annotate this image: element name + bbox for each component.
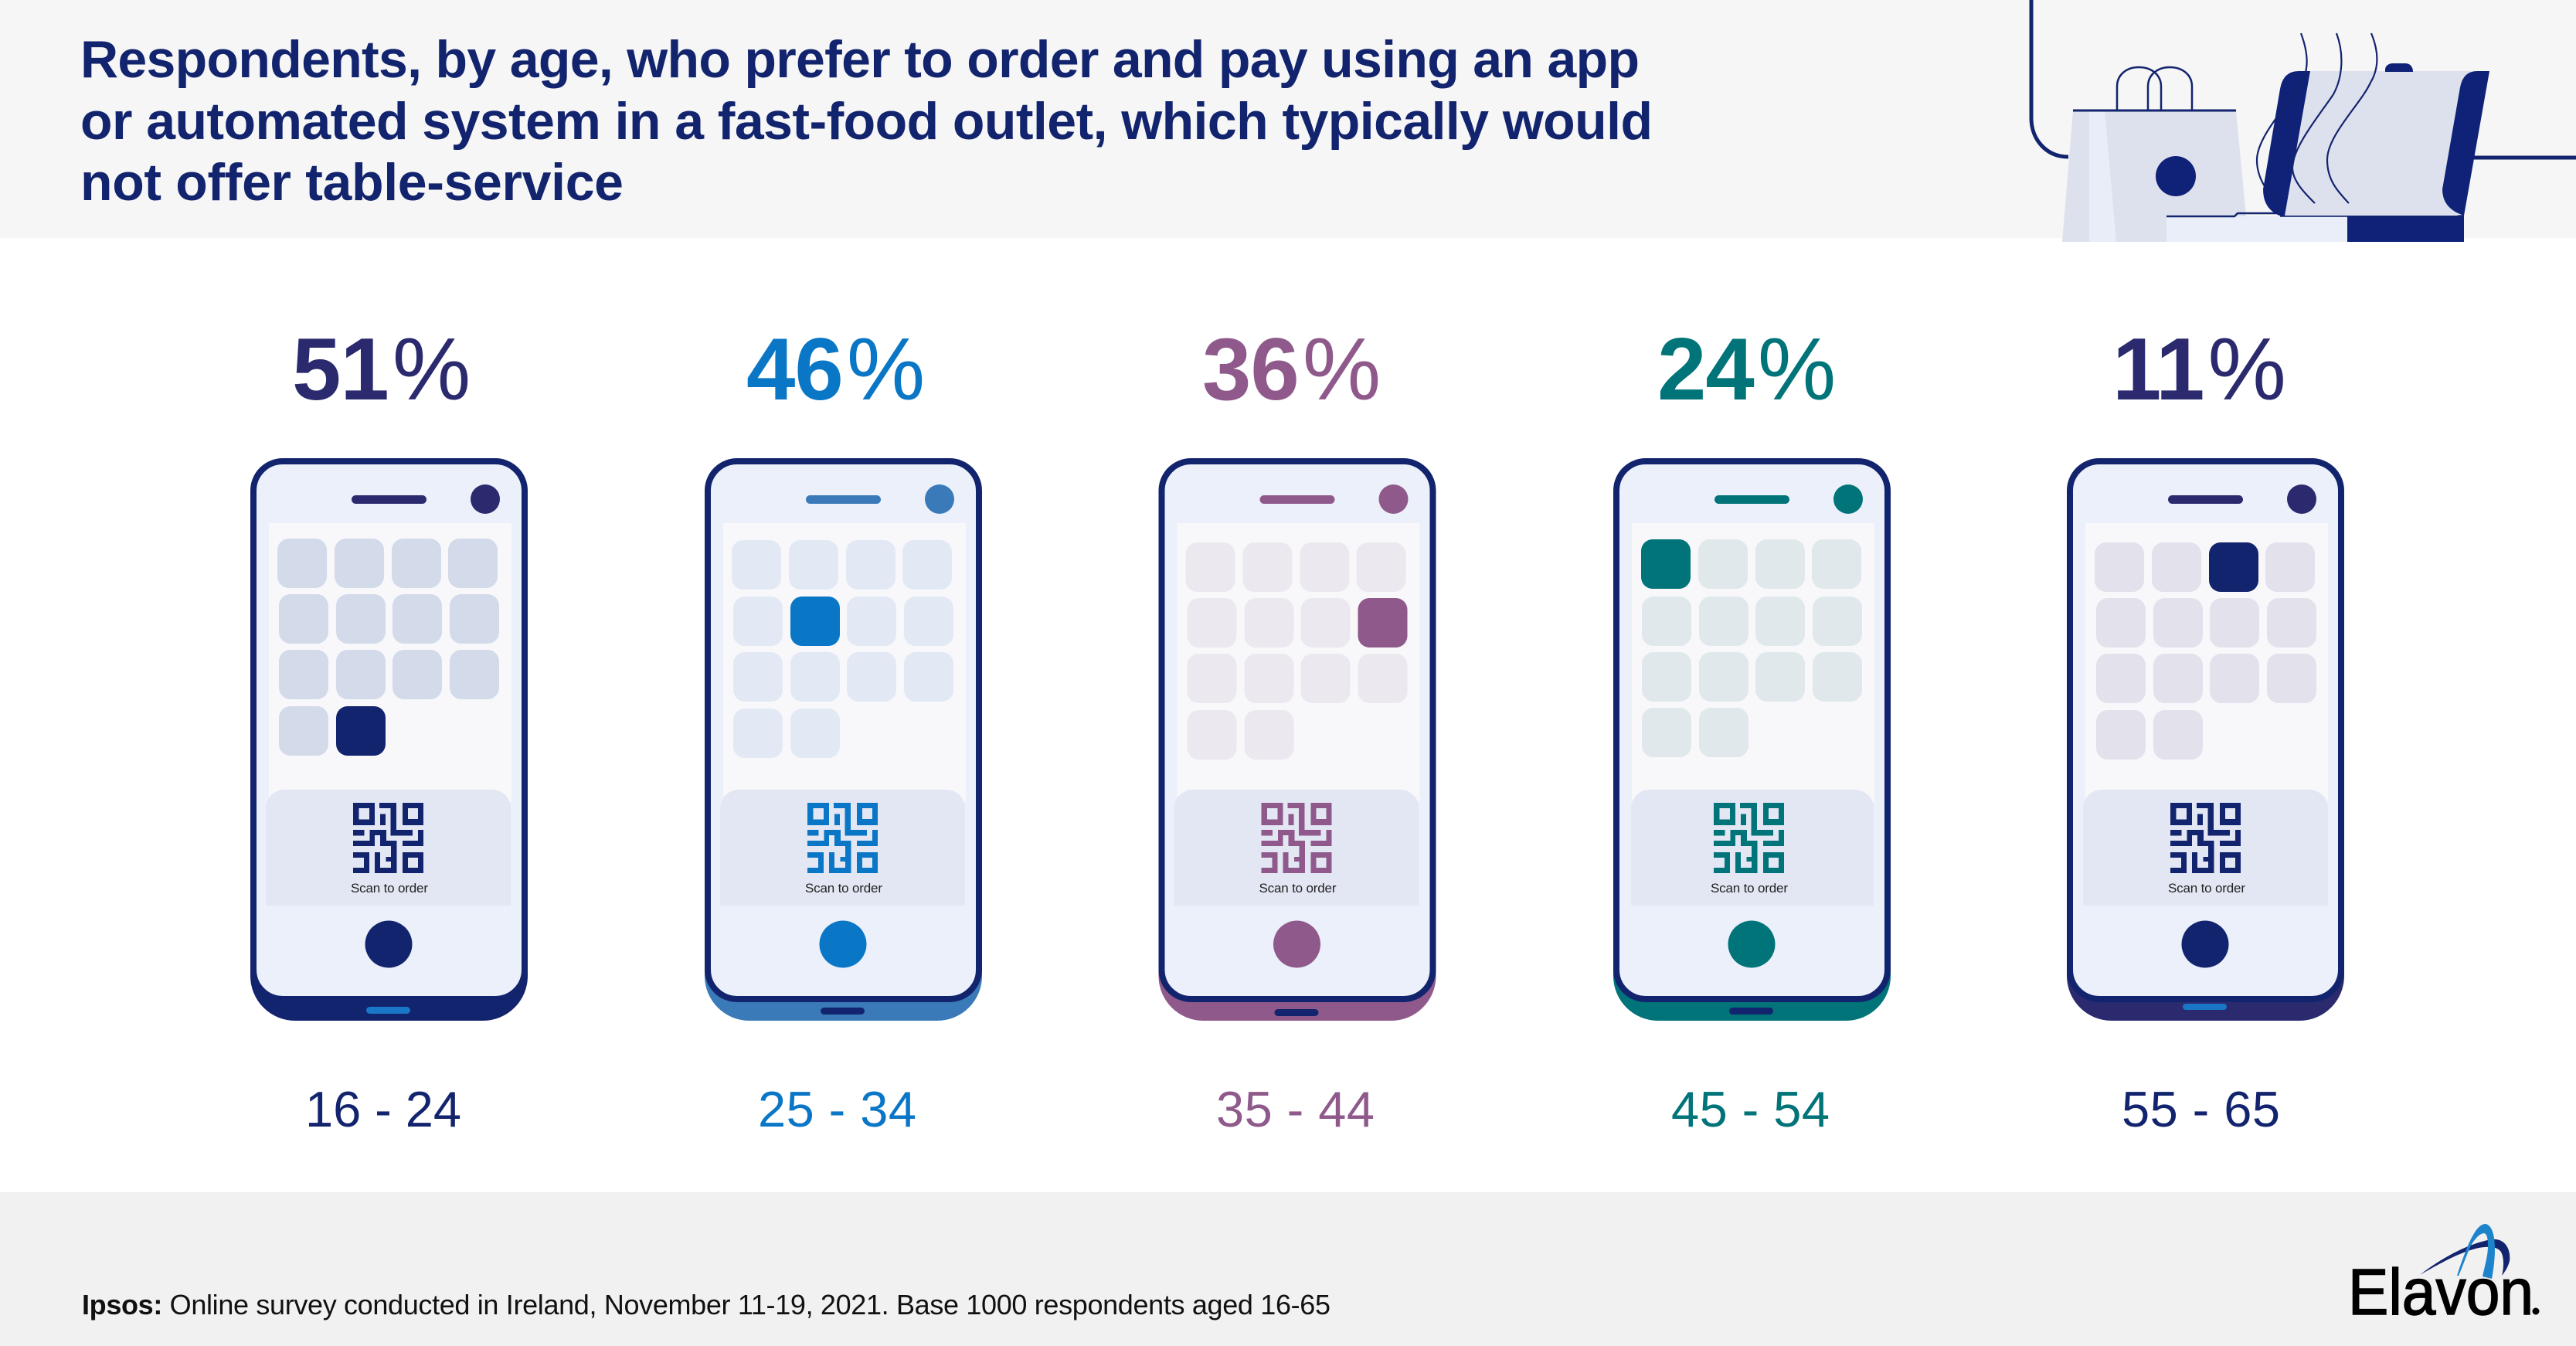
title: Respondents, by age, who prefer to order and pay using an app	[80, 30, 1640, 89]
age label: 55 - 65: 55 - 65	[2122, 1081, 2280, 1137]
percentage: 24%: 24%	[1657, 321, 1836, 419]
phone: 16-24	[250, 461, 528, 1021]
scan to order label: Scan to order	[805, 881, 882, 896]
app tile grid	[277, 539, 499, 756]
QR code	[353, 803, 423, 873]
QR code	[807, 803, 878, 873]
illustration: takeaway bag and food box	[2031, 0, 2576, 242]
percentage: 46%: 46%	[746, 321, 925, 419]
age label: 25 - 34: 25 - 34	[758, 1081, 916, 1137]
panel: age 45-54	[1613, 321, 1891, 1137]
QR code	[1261, 803, 1332, 873]
title: or automated system in a fast-food outlet, which typically would	[80, 92, 1653, 151]
phone: 45-54	[1613, 461, 1891, 1021]
QR code	[1714, 803, 1784, 873]
scan to order label: Scan to order	[2168, 881, 2245, 896]
percentage: 36%: 36%	[1202, 321, 1381, 419]
scan to order label: Scan to order	[1259, 881, 1337, 896]
phone: 55-65	[2067, 461, 2344, 1021]
QR code	[2170, 803, 2241, 873]
scan to order label: Scan to order	[1711, 881, 1788, 896]
app tile grid	[1641, 539, 1862, 757]
age label: 45 - 54: 45 - 54	[1671, 1081, 1830, 1137]
panel: age 55-65	[2067, 321, 2344, 1137]
Elavon logo: Elavon	[2348, 1256, 2534, 1328]
percentage: 51%: 51%	[292, 321, 471, 419]
age label: 35 - 44: 35 - 44	[1216, 1081, 1375, 1137]
app tile grid	[2095, 542, 2316, 760]
phone: 35-44	[1159, 461, 1436, 1021]
app tile grid	[732, 540, 953, 758]
Elavon logo	[2348, 1224, 2539, 1328]
panel: age 35-44	[1159, 321, 1436, 1137]
footer source note: Ipsos: Online survey conducted in Ireland, November 11-19, 2021. Base 1000 respondents aged 16-65	[82, 1289, 1330, 1321]
percentage: 11%: 11%	[2112, 321, 2286, 419]
panel: age 16-24	[250, 321, 528, 1137]
title: not offer table-service	[80, 153, 624, 212]
app tile grid	[1185, 542, 1408, 760]
phone: 25-34	[705, 461, 982, 1021]
scan to order label: Scan to order	[351, 881, 428, 896]
panel: age 25-34	[705, 321, 982, 1137]
age label: 16 - 24: 16 - 24	[305, 1081, 461, 1137]
title	[80, 30, 1653, 212]
